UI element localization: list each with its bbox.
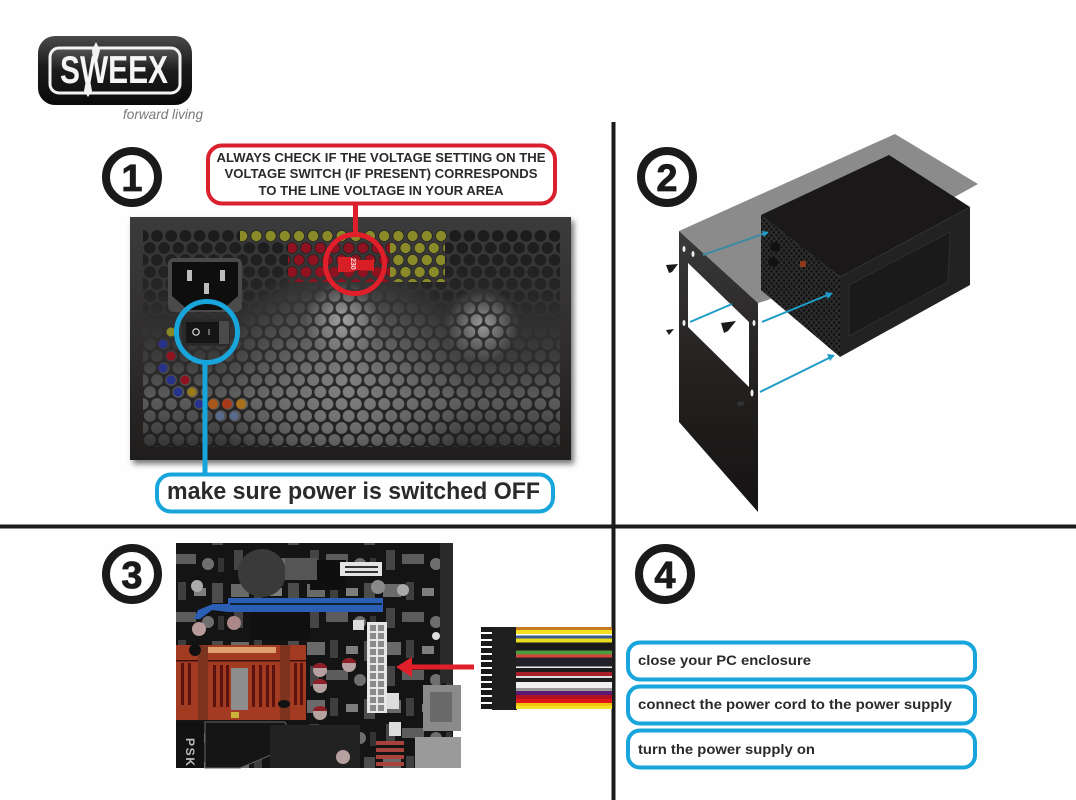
panel: power supply rear <box>130 217 574 464</box>
step number 3 <box>106 548 158 600</box>
small white connectors <box>353 620 401 736</box>
instruction: connect power cord: connect the power cord to the power supply <box>638 696 952 712</box>
step number 2: 2 <box>656 158 678 200</box>
instruction: close enclosure <box>628 642 975 680</box>
psu box <box>761 155 970 357</box>
connector line red <box>353 203 358 237</box>
wires <box>516 627 612 709</box>
bracket holes <box>682 246 756 396</box>
step number 1: 1 <box>121 158 143 200</box>
atx connector <box>367 622 387 713</box>
power socket <box>168 258 242 312</box>
chip and capacitor <box>238 549 286 597</box>
perforated holes <box>143 230 560 447</box>
blue pci-e slot <box>194 598 383 619</box>
heatsink <box>176 644 306 720</box>
power switch <box>182 319 230 346</box>
illustration: motherboard <box>176 543 461 768</box>
step number 2 <box>641 151 693 203</box>
voltage switch <box>338 257 374 272</box>
black areas <box>176 722 204 768</box>
callout: power off: make sure power is switched OFF <box>167 478 540 505</box>
blue highlight circle <box>176 302 238 362</box>
callout: voltage warning: TO THE LINE VOLTAGE IN YOUR AREA <box>258 183 504 198</box>
voltage switch: 230 <box>349 258 356 270</box>
step number 3: 3 <box>121 555 143 597</box>
red holes <box>288 242 390 282</box>
logo: Sweex forward living: SWEEX <box>60 49 168 92</box>
arrow: red to connector <box>396 657 474 677</box>
connector teeth <box>481 627 493 709</box>
step number 1 <box>106 151 158 203</box>
yellow holes <box>240 230 450 282</box>
callout: voltage warning: VOLTAGE SWITCH (IF PRESENT) CORRESPONDS <box>224 166 538 181</box>
instruction: turn on <box>628 730 975 768</box>
logo: Sweex forward living <box>38 36 203 122</box>
capacitors <box>191 580 409 764</box>
grey sheet <box>679 134 978 303</box>
lit holes <box>234 270 517 447</box>
instruction: close enclosure: close your PC enclosure <box>638 652 811 668</box>
illustration: atx cable <box>481 627 612 710</box>
step number 4: 4 <box>654 555 676 597</box>
callout: voltage warning: ALWAYS CHECK IF THE VOLTAGE SETTING ON THE <box>216 150 546 165</box>
red highlight circle <box>326 234 384 294</box>
io ports <box>415 632 461 768</box>
logo: Sweex forward living: forward living <box>123 106 203 122</box>
step number 4 <box>639 548 691 600</box>
board label: PSK <box>183 738 197 766</box>
instruction: turn on: turn the power supply on <box>638 741 815 757</box>
coloured holes left <box>158 328 246 420</box>
arrows <box>690 231 835 392</box>
connector line blue <box>202 362 208 476</box>
instruction: connect power cord <box>628 686 975 724</box>
screws <box>666 264 745 406</box>
white slot <box>340 562 382 576</box>
red ram traces <box>376 741 404 766</box>
bracket <box>679 231 758 512</box>
callout: voltage warning <box>208 146 555 204</box>
illustration: bracket mounting <box>666 134 978 512</box>
